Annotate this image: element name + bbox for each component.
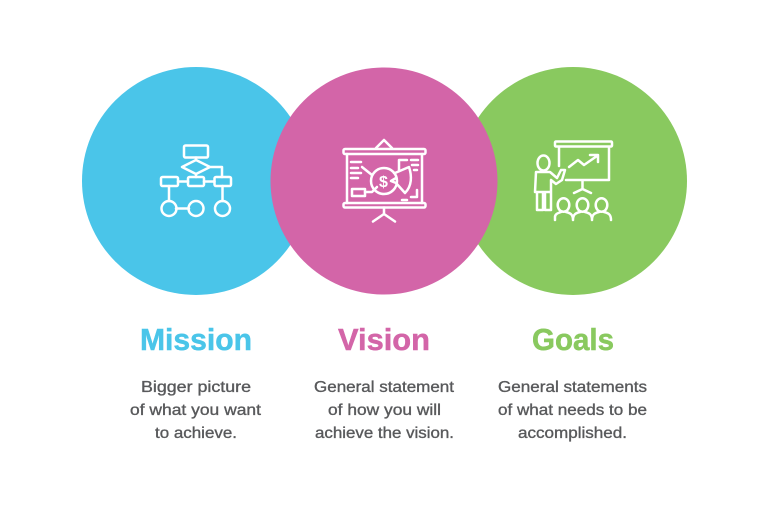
heading: Mission: Mission [140,322,252,357]
text block: goals description: General statements [498,379,647,396]
icon: flowchart [161,146,231,216]
text block: vision description [314,379,455,442]
text block: vision description: of how you will [328,402,441,419]
text block: vision description: achieve the vision. [315,425,454,442]
circle: goals [459,67,687,295]
heading: Vision: Vision [338,322,430,357]
icon: presentation board with dollar target: $ [379,174,388,191]
text block: vision description: General statement [314,379,455,396]
circle: vision [270,68,498,294]
text block: goals description: of what needs to be [498,402,647,419]
icon: presentation board with dollar target [344,140,426,222]
text block: goals description: accomplished. [518,425,627,442]
text block: mission description [130,379,262,442]
text block: mission description: of what you want [130,402,262,419]
circle: mission [82,67,310,295]
heading: Goals: Goals [532,322,614,357]
text block: goals description [498,379,647,442]
text block: mission description: Bigger picture [141,379,251,396]
icon: presenter with audience [535,142,612,220]
text block: mission description: to achieve. [155,425,237,442]
